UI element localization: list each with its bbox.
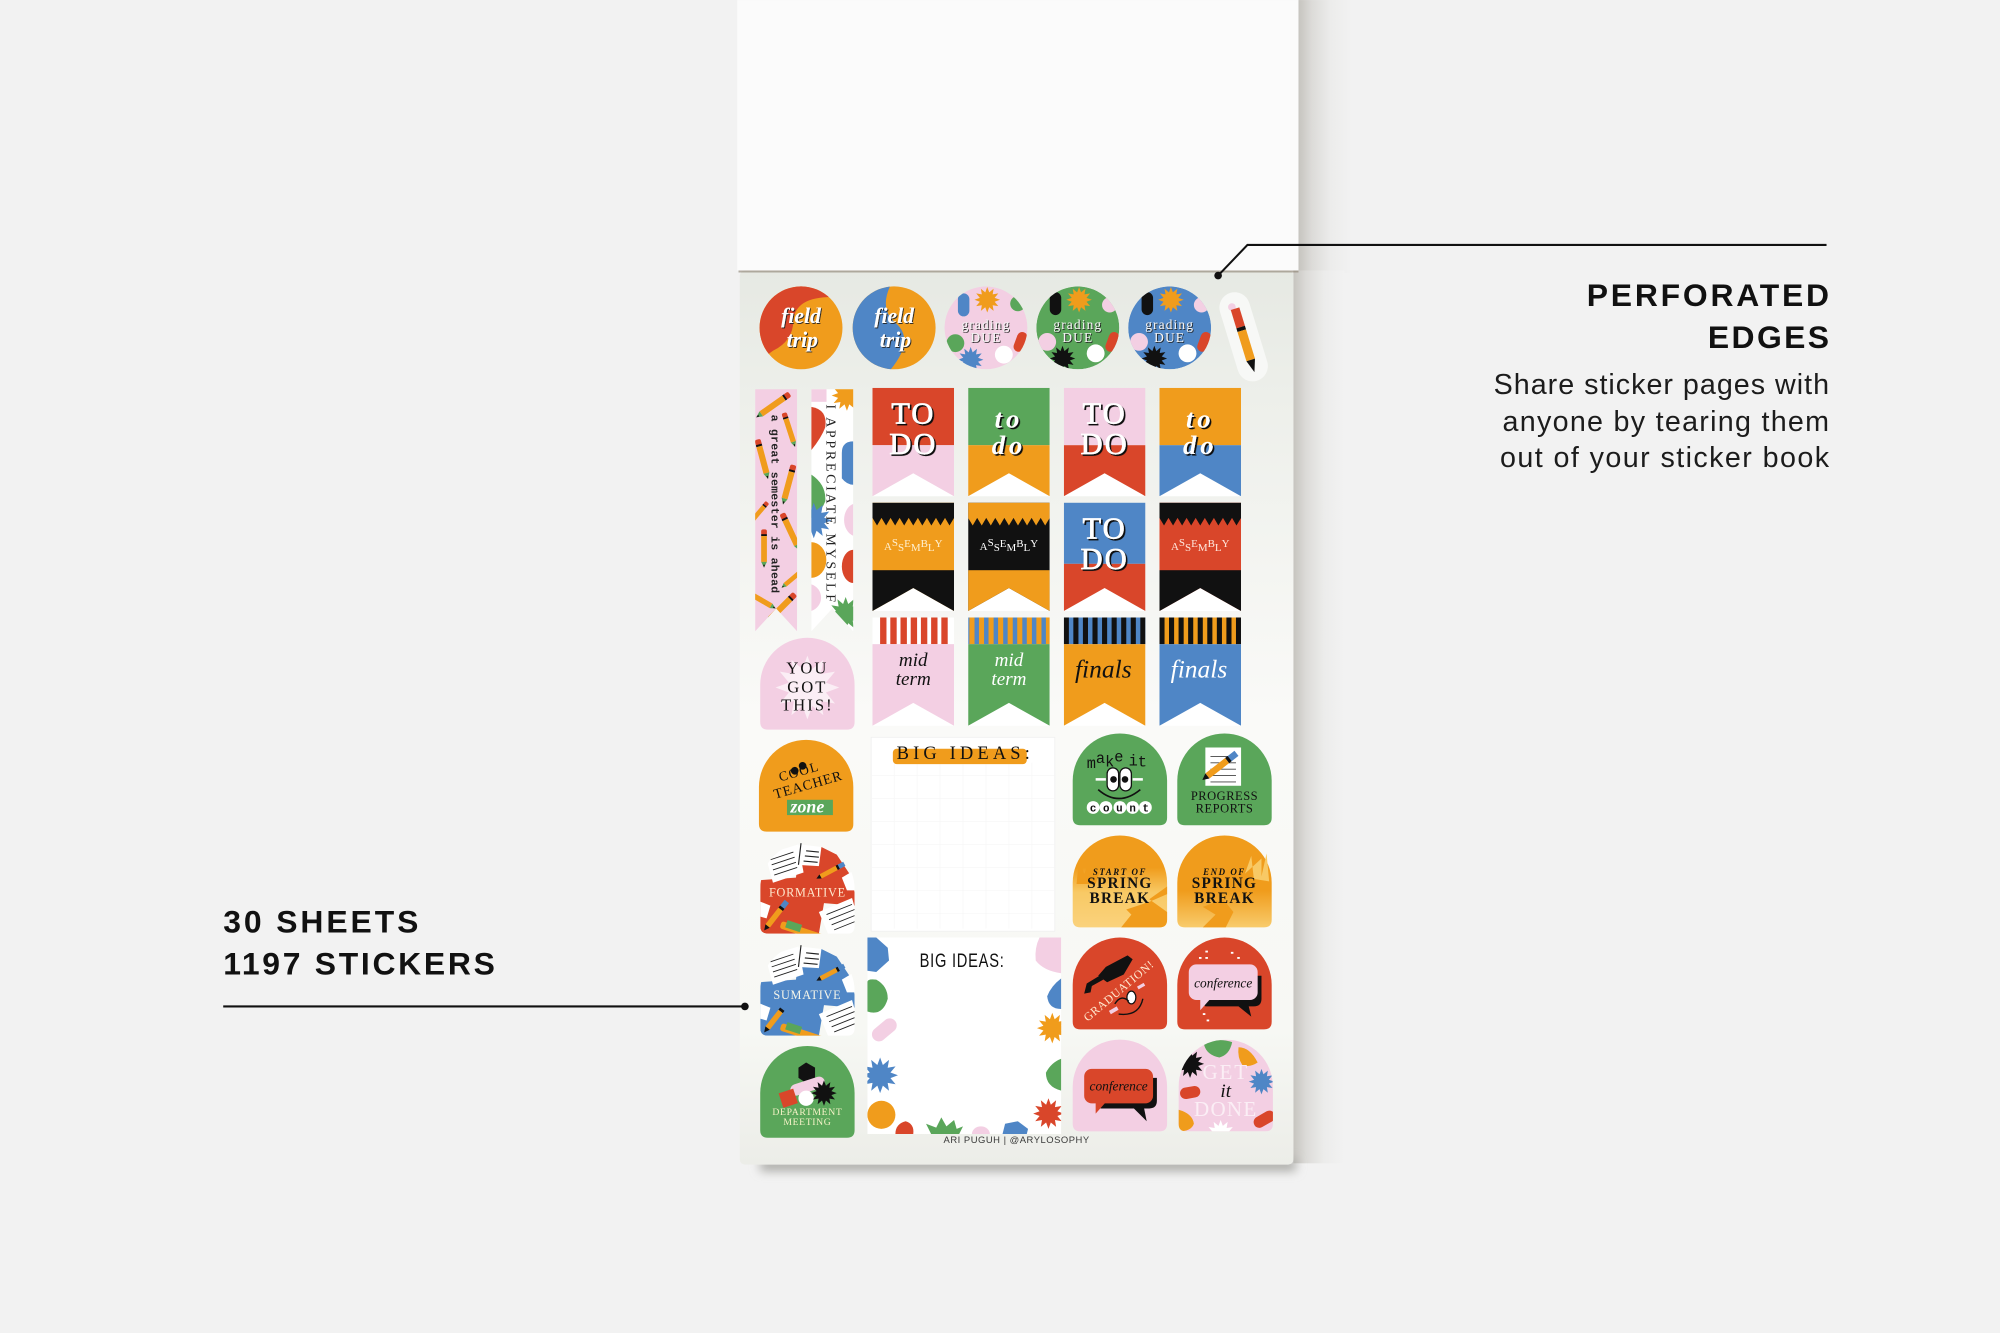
sticker: you got this: GOT	[787, 678, 827, 697]
sticker: graduation	[1073, 938, 1167, 1029]
sticker: make it count: count	[1090, 803, 1156, 815]
flag: to do orange blue: do	[1183, 430, 1217, 460]
callout heading: EDGES	[1708, 319, 1829, 355]
sticker: sumative	[760, 945, 854, 1036]
flag: assembly red: S	[1185, 542, 1191, 554]
callout body: anyone by tearing them	[1503, 406, 1829, 438]
flag: assembly black: E	[1000, 538, 1007, 550]
flag: TO DO pink red: DO	[1081, 427, 1129, 461]
flag: assembly black: S	[988, 537, 994, 549]
sticker: graduation: GRADUATION!	[1081, 958, 1157, 1024]
sticker: start of spring break: START OF	[1093, 867, 1147, 877]
sticker: field trip red: trip	[787, 328, 818, 352]
row of round stickers	[759, 286, 1272, 385]
flag: assembly black: S	[994, 542, 1000, 554]
flag: TO DO red pink	[872, 388, 954, 496]
flag: assembly red	[1159, 503, 1241, 611]
sticker: end of spring break: SPRING	[1192, 875, 1257, 892]
flag: mid term green: mid	[995, 650, 1024, 671]
flag: assembly black: L	[1024, 542, 1031, 554]
sticker: grading due blue	[1128, 286, 1212, 371]
flag: TO DO blue red: TO	[1083, 511, 1127, 545]
flag: assembly black	[968, 503, 1050, 611]
credit line: ARI PUGUH | @ARYLOSOPHY	[944, 1134, 1090, 1145]
sticker: sumative: SUMATIVE	[773, 988, 841, 1002]
flag: to do orange blue	[1159, 388, 1241, 496]
flag: assembly orange: B	[921, 538, 928, 550]
leader line	[1214, 245, 1827, 279]
sticker: you got this: YOU	[786, 659, 828, 678]
sticker: start of spring break	[1073, 836, 1167, 927]
sticker: start of spring break: SPRING	[1087, 875, 1153, 892]
washi strip: I appreciate myself: I APPRECIATE MYSELF	[823, 404, 839, 602]
flag: finals blue	[1159, 617, 1241, 726]
note panel: big ideas with shapes: BIG IDEAS:	[920, 949, 1004, 971]
sticker: conference pink	[1073, 1040, 1167, 1131]
sticker: make it count: m	[1087, 755, 1096, 773]
sticker: make it count: k	[1105, 754, 1114, 772]
flag: assembly black: M	[1006, 542, 1016, 554]
callout: sheet count	[223, 903, 749, 1010]
flag: finals orange	[1064, 617, 1145, 726]
flag: to do green orange: to	[995, 403, 1023, 433]
sticker sheet page	[740, 270, 1293, 1165]
washi strip: a great semester is ahead: a great semester is ahead	[768, 415, 781, 593]
sticker: start of spring break: BREAK	[1090, 890, 1150, 907]
sticker: end of spring break: END OF	[1202, 867, 1246, 877]
flag: mid term pink	[872, 617, 954, 726]
callout body: out of your sticker book	[1500, 442, 1830, 474]
flag: assembly orange: L	[928, 542, 935, 554]
sticker: grading due pink	[945, 286, 1029, 372]
sticker: get it done	[1178, 1040, 1273, 1132]
sticker: pencil	[1216, 288, 1272, 385]
flag: mid term pink: mid	[899, 650, 928, 671]
note panel: big ideas grid	[871, 737, 1055, 931]
flag: TO DO blue red	[1064, 503, 1145, 611]
sticker: you got this	[760, 638, 855, 730]
sticker: make it count: i	[1129, 752, 1138, 770]
sticker: department meeting: MEETING	[783, 1117, 831, 1128]
sticker: conference red: conference	[1194, 975, 1252, 990]
flag: TO DO red pink: DO	[889, 427, 937, 461]
sticker: grading due green: grading	[1053, 317, 1102, 332]
sticker: progress reports	[1177, 733, 1272, 825]
flag: assembly orange: S	[892, 537, 898, 549]
callout: perforated edges	[1214, 245, 1830, 474]
sticker: field trip red	[759, 286, 843, 370]
sticker: cool teacher zone: COOL	[777, 759, 821, 784]
sticker: cool teacher zone: TEACHER	[772, 768, 844, 803]
sticker: field trip blue: trip	[880, 328, 911, 352]
flag: to do green orange: do	[992, 430, 1026, 460]
flag: TO DO pink red: TO	[1083, 397, 1127, 431]
sticker: get it done: GET	[1202, 1060, 1249, 1084]
sticker: conference red	[1177, 938, 1272, 1029]
flag: TO DO pink red	[1064, 388, 1145, 496]
flag: assembly black: A	[980, 541, 988, 553]
flag: assembly black: Y	[1030, 538, 1038, 550]
callout body: Share sticker pages with	[1494, 369, 1829, 401]
sticker: field trip red: field	[781, 304, 822, 328]
sticker: make it count	[1073, 733, 1167, 825]
sticker: department meeting: DEPARTMENT	[772, 1107, 842, 1118]
sticker: conference pink: conference	[1090, 1079, 1148, 1094]
sticker: grading due blue: grading	[1145, 317, 1194, 332]
sticker: progress reports: PROGRESS	[1191, 789, 1258, 803]
flag: to do orange blue: to	[1186, 403, 1214, 433]
sticker: get it done: DONE	[1194, 1097, 1258, 1121]
flag: assembly orange	[872, 503, 954, 611]
flag: TO DO blue red: DO	[1081, 542, 1129, 576]
leader line	[223, 1003, 749, 1010]
sticker: grading due green: DUE	[1062, 330, 1093, 345]
flag: mid term green	[968, 617, 1050, 726]
flag: assembly orange: A	[884, 541, 892, 553]
sticker: grading due green	[1036, 286, 1121, 371]
note panel: big ideas grid: BIG IDEAS:	[897, 743, 1032, 763]
flag: assembly orange: E	[904, 538, 911, 550]
sticker: make it count: a	[1096, 750, 1105, 768]
flag grid	[872, 388, 1241, 726]
sticker: formative: FORMATIVE	[769, 886, 846, 900]
flag: assembly red: B	[1208, 538, 1215, 550]
sticker: make it count: e	[1114, 749, 1123, 767]
callout heading: 30 SHEETS	[223, 903, 418, 939]
torn top sheet	[737, 0, 1298, 272]
flag: assembly red: E	[1191, 538, 1198, 550]
sticker: get it done: it	[1220, 1081, 1232, 1102]
callout body	[1494, 369, 1830, 474]
callout heading	[1587, 277, 1829, 355]
callout heading	[223, 903, 495, 982]
sticker: grading due blue: DUE	[1154, 330, 1185, 345]
flag: mid term green: term	[991, 669, 1027, 690]
sticker: progress reports: REPORTS	[1196, 802, 1253, 816]
flag: assembly red: A	[1171, 541, 1179, 553]
sticker: formative	[760, 843, 854, 934]
flag: assembly black: B	[1016, 538, 1024, 550]
flag: assembly orange: Y	[935, 538, 943, 550]
washi strip: a great semester is ahead	[755, 389, 798, 631]
sticker: grading due pink: grading	[962, 317, 1010, 332]
note panel: big ideas with shapes	[862, 938, 1068, 1134]
sticker: cool teacher zone	[759, 740, 853, 832]
flag: assembly orange: M	[911, 542, 921, 554]
sticker: end of spring break	[1177, 836, 1272, 927]
book shadow	[760, 0, 1352, 1171]
flag: assembly red: Y	[1222, 538, 1230, 550]
sticker: you got this: THIS!	[781, 696, 834, 715]
flag: assembly red: S	[1179, 537, 1185, 549]
flag: finals blue: finals	[1171, 654, 1227, 683]
washi strip: I appreciate myself	[811, 389, 854, 630]
flag: mid term pink: term	[896, 669, 931, 690]
flag: assembly red: L	[1215, 542, 1222, 554]
callout heading: 1197 STICKERS	[223, 946, 495, 982]
flag: finals orange: finals	[1075, 654, 1132, 683]
flag: assembly red: M	[1198, 542, 1208, 554]
sticker: field trip blue	[852, 286, 936, 370]
flag: to do green orange	[968, 388, 1050, 496]
callout heading: PERFORATED	[1587, 277, 1829, 313]
sticker: make it count: t	[1138, 754, 1147, 772]
sticker: end of spring break: BREAK	[1194, 890, 1255, 907]
sticker: department meeting	[760, 1046, 855, 1138]
sticker: grading due pink: DUE	[971, 330, 1001, 345]
sticker: cool teacher zone: zone	[790, 797, 824, 817]
sticker: field trip blue: field	[874, 304, 915, 328]
flag: TO DO red pink: TO	[891, 397, 935, 431]
flag: assembly orange: S	[898, 542, 904, 554]
